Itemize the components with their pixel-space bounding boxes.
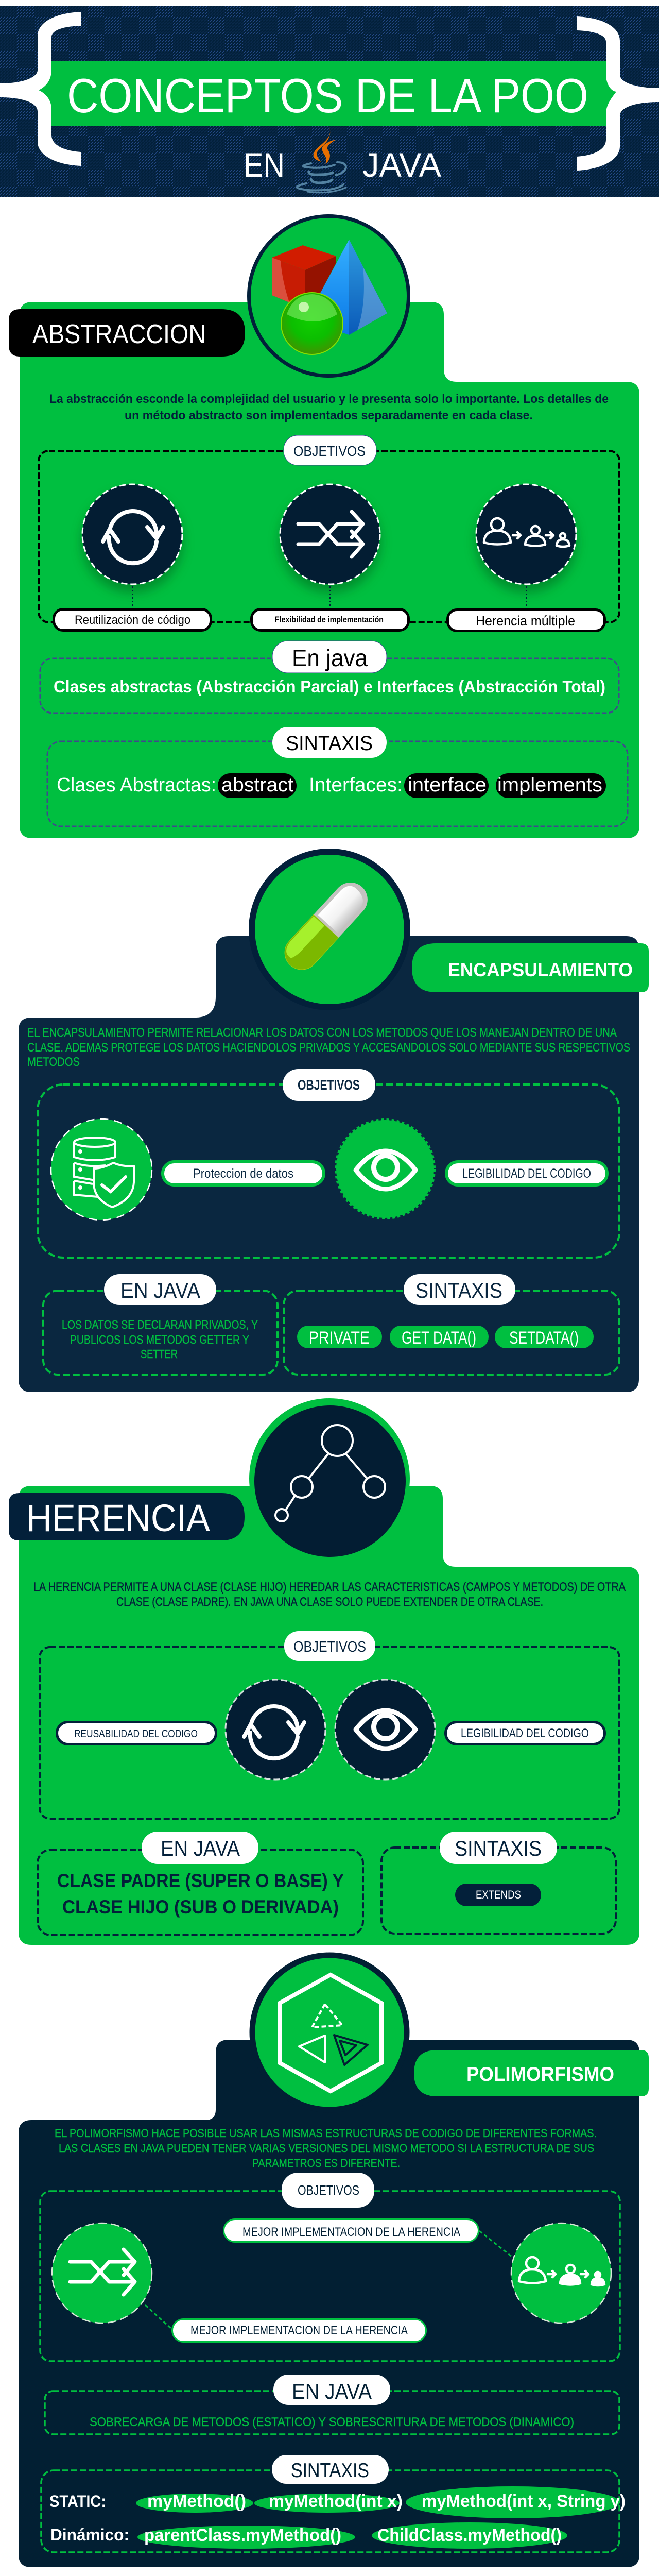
icon: eye [336, 1120, 434, 1218]
description [27, 1026, 630, 1069]
panel: encapsulamiento [19, 852, 649, 1392]
description [33, 1580, 626, 1609]
icon: people [511, 2223, 611, 2323]
description: PARAMETROS ES DIFERENTE. [252, 2157, 400, 2170]
label: mejor implementacion top [223, 2219, 479, 2242]
en java box: SOBRECARGA DE METODOS (ESTATICO) Y SOBRESCRITURA DE METODOS (DINAMICO) [90, 2415, 574, 2429]
description: CLASE (CLASE PADRE). EN JAVA UNA CLASE SOLO PUEDE EXTENDER DE OTRA CLASE. [116, 1595, 543, 1609]
icon: eye [335, 1680, 435, 1780]
description: La abstracción esconde la complejidad del usuario y le presenta solo lo importante. Los detalles de [49, 392, 609, 406]
heading: polimorfismo [414, 2050, 649, 2096]
subtitle right: JAVA [362, 146, 441, 184]
en java box: EN JAVA [120, 1278, 200, 1302]
heading: abstraccion [9, 309, 245, 357]
icon: java cup logo [297, 126, 346, 193]
label: legibilidad [446, 1162, 607, 1185]
sintaxis box: interface [408, 774, 487, 796]
en java box: En java [292, 645, 368, 671]
sintaxis box: SINTAXIS [415, 1278, 502, 1302]
en java box [40, 641, 619, 713]
sintaxis box: SETDATA() [509, 1328, 579, 1348]
icon: hexagon badge [252, 1955, 407, 2110]
description: EL POLIMORFISMO HACE POSIBLE USAR LAS MISMAS ESTRUCTURAS DE CODIGO DE DIFERENTES FORMAS. [55, 2127, 597, 2140]
en java box: CLASE PADRE (SUPER O BASE) Y [57, 1870, 344, 1891]
en java box [45, 2375, 619, 2434]
sintaxis box: Clases Abstractas: [57, 774, 216, 796]
panel: abstraccion [9, 216, 639, 838]
objective: flexibilidad [251, 484, 409, 631]
label: legibilidad: LEGIBILIDAD DEL CODIGO [462, 1166, 591, 1181]
en java box: SETTER [141, 1347, 178, 1361]
objetivos box [40, 1631, 619, 1819]
connector [479, 2231, 512, 2257]
objetivos heading [283, 1069, 375, 1101]
objective: reutilizacion [54, 484, 211, 631]
icon: tree badge [249, 1398, 410, 1559]
icon: refresh [226, 1680, 325, 1780]
heading: abstraccion: ABSTRACCION [32, 319, 206, 349]
en java box: LOS DATOS SE DECLARAN PRIVADOS, Y [62, 1318, 258, 1331]
objetivos box [38, 1069, 619, 1258]
objective: reutilizacion: Reutilización de código [75, 613, 190, 627]
icon: capsule badge [252, 852, 407, 1007]
sintaxis box [284, 1274, 619, 1375]
sintaxis box [47, 727, 628, 826]
description: LAS CLASES EN JAVA PUEDEN TENER VARIAS VERSIONES DEL MISMO METODO SI LA ESTRUCTURA DE SUS [59, 2142, 594, 2155]
sintaxis box: parentClass.myMethod() [144, 2526, 341, 2545]
sintaxis box: Interfaces: [309, 774, 403, 796]
sintaxis box [41, 2455, 626, 2552]
en java box [38, 1832, 363, 1935]
icon: left curly brace [0, 12, 81, 166]
panel: herencia [9, 1398, 639, 1945]
description: un método abstracto son implementados separadamente en cada clase. [125, 409, 533, 422]
icon: shuffle [52, 2223, 152, 2323]
label: legibilidad: LEGIBILIDAD DEL CODIGO [461, 1726, 589, 1740]
sintaxis box: SINTAXIS [286, 732, 373, 755]
sintaxis box: SINTAXIS [291, 2460, 369, 2482]
sintaxis box: EXTENDS [476, 1888, 521, 1901]
icon: right curly brace [577, 16, 659, 171]
heading: encapsulamiento [412, 943, 649, 992]
sintaxis box: implements [497, 774, 602, 796]
objetivos box [40, 2173, 620, 2361]
description: METODOS [27, 1055, 80, 1069]
objetivos heading: OBJETIVOS [293, 443, 366, 459]
objetivos heading [284, 1631, 375, 1661]
sintaxis box [381, 1832, 616, 1934]
panel: polimorfismo [19, 1955, 649, 2567]
heading: encapsulamiento: ENCAPSULAMIENTO [448, 959, 633, 980]
icon: data protection [51, 1119, 152, 1220]
en java box: PUBLICOS LOS METODOS GETTER Y [70, 1333, 249, 1346]
header banner [0, 6, 659, 197]
sintaxis box: PRIVATE [309, 1328, 370, 1348]
objetivos heading: OBJETIVOS [293, 1639, 366, 1655]
title band: CONCEPTOS DE LA POO [67, 69, 588, 123]
sintaxis box: STATIC: [49, 2492, 106, 2511]
objective: herencia multiple: Herencia múltiple [476, 613, 575, 629]
label: reusabilidad: REUSABILIDAD DEL CODIGO [74, 1728, 198, 1740]
description [49, 392, 609, 422]
sintaxis box: Dinámico: [50, 2526, 129, 2544]
objetivos heading [282, 2173, 374, 2208]
en java box [43, 1274, 278, 1375]
sintaxis box: myMethod(int x, String y) [422, 2492, 626, 2511]
sintaxis box: SINTAXIS [455, 1836, 542, 1860]
label: mejor implementacion bottom: MEJOR IMPLEMENTACION DE LA HERENCIA [190, 2324, 408, 2337]
objetivos heading: OBJETIVOS [298, 1077, 360, 1093]
objective: flexibilidad: Flexibilidad de implementación [275, 615, 384, 624]
sintaxis box: myMethod(int x) [269, 2492, 403, 2511]
sintaxis box: ChildClass.myMethod() [377, 2526, 562, 2545]
en java box: Clases abstractas (Abstracción Parcial) e Interfaces (Abstracción Total) [54, 677, 605, 696]
icon: 3d shapes badge [249, 216, 409, 376]
label: proteccion de datos [163, 1162, 324, 1185]
heading: polimorfismo: POLIMORFISMO [466, 2063, 614, 2086]
heading: herencia: HERENCIA [26, 1497, 211, 1539]
objetivos heading [284, 435, 376, 465]
objetivos heading: OBJETIVOS [298, 2182, 359, 2198]
sintaxis box: GET DATA() [402, 1328, 476, 1348]
sintaxis box: abstract [221, 774, 293, 796]
label: mejor implementacion bottom [172, 2319, 426, 2342]
label: mejor implementacion top: MEJOR IMPLEMENTACION DE LA HERENCIA [242, 2225, 460, 2239]
objetivos box [39, 435, 619, 631]
label: reusabilidad [57, 1722, 216, 1744]
label: legibilidad [446, 1722, 604, 1744]
label: proteccion de datos: Proteccion de datos [193, 1166, 293, 1181]
sintaxis box: myMethod() [147, 2492, 246, 2511]
subtitle left: EN [244, 146, 285, 184]
objective: herencia multiple [448, 484, 604, 631]
description [55, 2127, 597, 2170]
en java box: EN JAVA [161, 1836, 240, 1860]
connector [145, 2305, 172, 2330]
en java box: CLASE HIJO (SUB O DERIVADA) [62, 1896, 339, 1918]
en java box: EN JAVA [292, 2379, 372, 2403]
